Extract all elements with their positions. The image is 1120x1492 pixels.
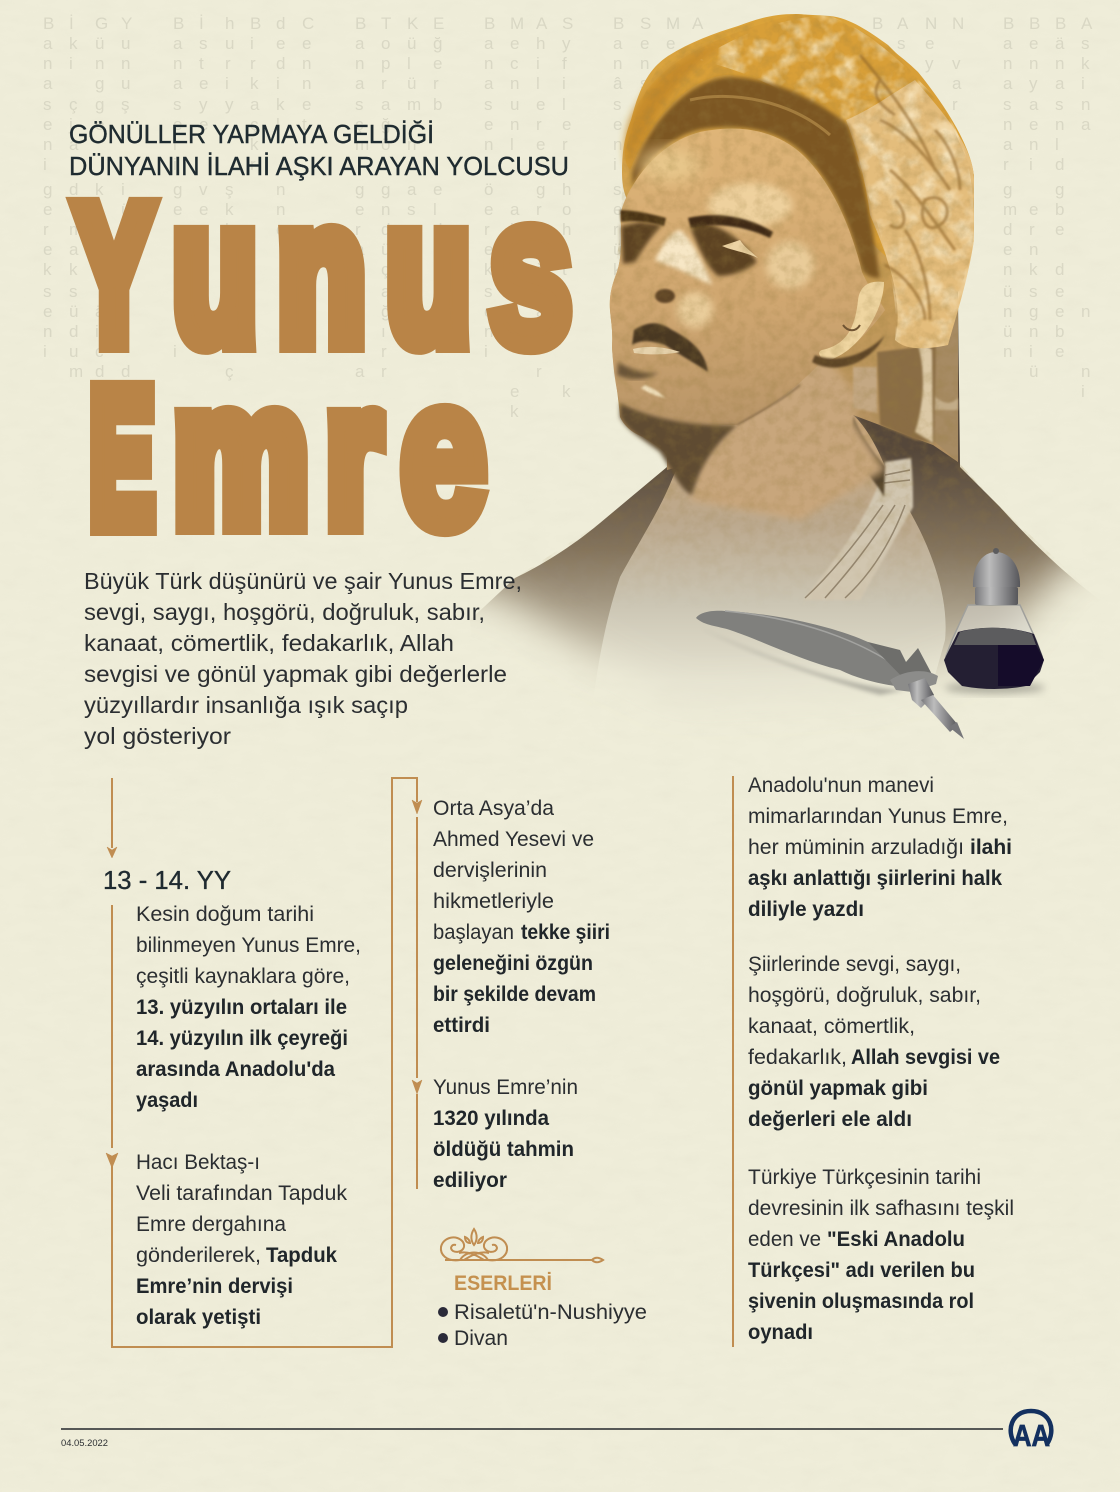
- paragraph: language: Türkiye Türkçesinin tarihi: [748, 1166, 981, 1189]
- big name: Yunus: u: [387, 163, 470, 383]
- paragraph: Central Asia: Orta Asya’da: [433, 797, 554, 820]
- paragraph: Hacı Bektaş: Emre dergahına: [136, 1213, 286, 1236]
- portrait: head and turban silhouette: [610, 14, 974, 470]
- paragraph: themes: Allah sevgisi ve: [851, 1046, 1000, 1069]
- paragraph: birth date: çeşitli kaynaklara göre,: [136, 965, 350, 988]
- intro text: [84, 568, 522, 749]
- big name: Yunus: u: [174, 163, 256, 383]
- paragraph: Hacı Bektaş: [136, 1151, 348, 1329]
- works heading: ESERLERİ: [454, 1272, 552, 1295]
- background letter pattern: eki: [510, 382, 1085, 401]
- paragraph: Hacı Bektaş: gönderilerek,: [136, 1244, 261, 1267]
- arrowhead: Hacı Bektaş: [106, 1153, 118, 1168]
- column 3: legacy: [748, 774, 1014, 1344]
- paragraph: themes: hoşgörü, doğruluk, sabır,: [748, 984, 981, 1007]
- paragraph: spiritual architects: her müminin arzuladığı: [748, 836, 964, 859]
- background letter pattern: naikmönnlernanl: [43, 135, 1059, 154]
- paragraph: Central Asia: geleneğini özgün: [433, 952, 593, 975]
- century heading: 13 - 14. YY: [103, 865, 231, 895]
- paragraph: language: "Eski Anadolu: [827, 1228, 965, 1251]
- background letter pattern: iirıirid: [43, 155, 1064, 174]
- work: Risaletü'n-Nushiyye: Risaletü'n-Nushiyye: [454, 1301, 647, 1324]
- portrait: turban mottling: [700, 16, 974, 348]
- paragraph: themes: [748, 953, 1000, 1131]
- paragraph: death: öldüğü tahmin: [433, 1138, 574, 1161]
- portrait: neck and hanging cloth: [690, 300, 958, 520]
- paragraph: themes: fedakarlık,: [748, 1046, 847, 1069]
- intro text: sevgi, saygı, hoşgörü, doğruluk, sabır,: [84, 599, 485, 625]
- paragraph: Hacı Bektaş: Hacı Bektaş-ı: [136, 1151, 260, 1174]
- big name: Yunus: s: [489, 152, 573, 389]
- intro text: sevgisi ve gönül yapmak gibi değerlerle: [84, 661, 507, 687]
- paragraph: death: ediliyor: [433, 1169, 507, 1192]
- paragraph: death: Yunus Emre’nin: [433, 1076, 578, 1099]
- background letter pattern: k: [510, 402, 519, 421]
- arrowhead: Orta Asya: [412, 800, 422, 814]
- paragraph: themes: kanaat, cömertlik,: [748, 1015, 915, 1038]
- big name: Yunus: n: [278, 163, 365, 383]
- footer rule: [61, 1428, 1003, 1430]
- paragraph: birth date: 14. yüzyılın ilk çeyreği: [136, 1027, 348, 1050]
- title: DÜNYANIN İLAHİ AŞKI ARAYAN YOLCUSU: [69, 152, 569, 181]
- background letter pattern: eüäğleaengen: [43, 302, 1090, 321]
- arrowhead: century marker: [107, 847, 117, 858]
- intro text: yol gösteriyor: [84, 723, 231, 749]
- paragraph: language: şivenin oluşmasında rol: [748, 1290, 974, 1313]
- work: Divan: Divan: [454, 1327, 508, 1350]
- title: GÖNÜLLER YAPMAYA GELDİĞİ: [69, 120, 434, 149]
- paragraph: birth date: yaşadı: [136, 1089, 198, 1112]
- icon: quill pen: [696, 611, 964, 739]
- paragraph: birth date: arasında Anadolu'da: [136, 1058, 335, 1081]
- paragraph: language: oynadı: [748, 1321, 813, 1344]
- date: 04.05.2022: [61, 1438, 108, 1449]
- background letter pattern: mddçarrün: [69, 362, 1090, 381]
- big name: Emre: [90, 334, 487, 571]
- portrait: coat: [476, 309, 1085, 688]
- paragraph: birth date: bilinmeyen Yunus Emre,: [136, 934, 361, 957]
- paragraph: Central Asia: Ahmed Yesevi ve: [433, 828, 594, 851]
- portrait: face: [610, 128, 885, 495]
- paragraph: language: eden ve: [748, 1228, 821, 1251]
- title: [69, 120, 569, 181]
- paragraph: language: Türkçesi" adı verilen bu: [748, 1259, 975, 1282]
- paragraph: birth date: [136, 903, 361, 1112]
- paragraph: themes: değerleri ele aldı: [748, 1108, 912, 1131]
- intro text: kanaat, cömertlik, fedakarlık, Allah: [84, 630, 454, 656]
- background letter pattern: ssaeseüse: [43, 282, 1064, 301]
- paragraph: Hacı Bektaş: Tapduk: [266, 1244, 337, 1267]
- paragraph: Central Asia: tekke şiiri: [521, 921, 610, 944]
- paragraph: spiritual architects: Anadolu'nun manevi: [748, 774, 934, 797]
- timeline lines and arrows: [106, 776, 733, 1347]
- paragraph: language: devresinin ilk safhasını teşkil: [748, 1197, 1014, 1220]
- paragraph: birth date: Kesin doğum tarihi: [136, 903, 314, 926]
- paragraph: death: 1320 yılında: [433, 1107, 549, 1130]
- portrait: printed grain: [522, 14, 1050, 574]
- intro text: yüzyıllardır insanlığa ışık saçıp: [84, 692, 408, 718]
- background letter pattern: ninnntrrdnnplencifnnyvnnnk: [43, 54, 1090, 73]
- paragraph: Hacı Bektaş: Veli tarafından Tapduk: [136, 1182, 348, 1205]
- paragraph: language: [748, 1166, 1014, 1344]
- column 2: tekke poetry and death: [433, 797, 610, 1192]
- paragraph: spiritual architects: diliyle yazdı: [748, 898, 864, 921]
- big name: Emre: e: [400, 334, 487, 571]
- logo: Anadolu Agency: AA: [1013, 1418, 1050, 1453]
- paragraph: spiritual architects: aşkı anlattığı şiirlerini halk: [748, 867, 1002, 890]
- portrait: robe and neck: [598, 415, 946, 709]
- column 1: birth: [103, 865, 361, 1329]
- portrait: beard shadow: [620, 403, 737, 495]
- paragraph: spiritual architects: mimarlarından Yunus Emre,: [748, 805, 1008, 828]
- big name: Emre: m: [174, 345, 308, 565]
- paragraph: Central Asia: başlayan: [433, 921, 514, 944]
- paragraph: Hacı Bektaş: Emre’nin dervişi: [136, 1275, 293, 1298]
- icon: ornament: [441, 1229, 603, 1262]
- paragraph: Central Asia: [433, 797, 610, 1037]
- paragraph: birth date: 13. yüzyılın ortaları ile: [136, 996, 347, 1019]
- arrowhead: Yunus Emre: [412, 1080, 422, 1094]
- paragraph: Central Asia: bir şekilde devam: [433, 983, 596, 1006]
- icon: ink bottle: [944, 548, 1045, 694]
- logo: Anadolu Agency: [1011, 1411, 1051, 1453]
- paragraph: Hacı Bektaş: olarak yetişti: [136, 1306, 261, 1329]
- paragraph: themes: Şiirlerinde sevgi, saygı,: [748, 953, 961, 976]
- portrait of Yunus Emre: [476, 14, 1085, 689]
- paragraph: spiritual architects: [748, 774, 1012, 921]
- paragraph: Central Asia: dervişlerinin: [433, 859, 547, 882]
- big name: Emre: r: [326, 345, 380, 565]
- works list: [438, 1272, 647, 1350]
- big name: Yunus: Y: [76, 167, 152, 382]
- paragraph: Central Asia: hikmetleriyle: [433, 890, 554, 913]
- portrait: turban: [625, 14, 974, 348]
- background letter pattern: BİGYBİhBdCBTKEBMASBSMABANNBBBA: [43, 14, 1093, 33]
- background letter pattern: eaeaüeeüen: [43, 240, 1038, 259]
- background letter pattern: eüeeknenslearoemeb: [43, 200, 1064, 219]
- background letter pattern: sçgşsyyakesambsuelsrsasn: [43, 95, 1090, 114]
- paragraph: spiritual architects: ilahi: [970, 836, 1012, 859]
- portrait: collar fold: [803, 415, 913, 600]
- background letter pattern: kkkçrkğtknkd: [43, 260, 1064, 279]
- background letter pattern: iucirinie: [43, 342, 1064, 361]
- background letter pattern: ejeeeçltçğenreenena: [43, 115, 1091, 134]
- big name: Emre: E: [90, 350, 155, 565]
- background letter pattern: ndiıeneünb: [43, 322, 1064, 341]
- background letter pattern: aguaeikinarüranliâsaayai: [43, 74, 1085, 93]
- paragraph: death: [433, 1076, 578, 1192]
- background letter pattern: gdkigvşnggaeöghsgg: [43, 180, 1064, 199]
- big name: Yunus: [76, 152, 573, 389]
- background letter pattern: aküuasuieeaoüğaehyaeeseaeäs: [43, 34, 1090, 53]
- background letter pattern: rmrelerdadrlehrdre: [43, 220, 1064, 239]
- background letter pattern: [43, 14, 1093, 421]
- paragraph: themes: gönül yapmak gibi: [748, 1077, 928, 1100]
- intro text: Büyük Türk düşünürü ve şair Yunus Emre,: [84, 568, 522, 594]
- paragraph: Central Asia: ettirdi: [433, 1014, 490, 1037]
